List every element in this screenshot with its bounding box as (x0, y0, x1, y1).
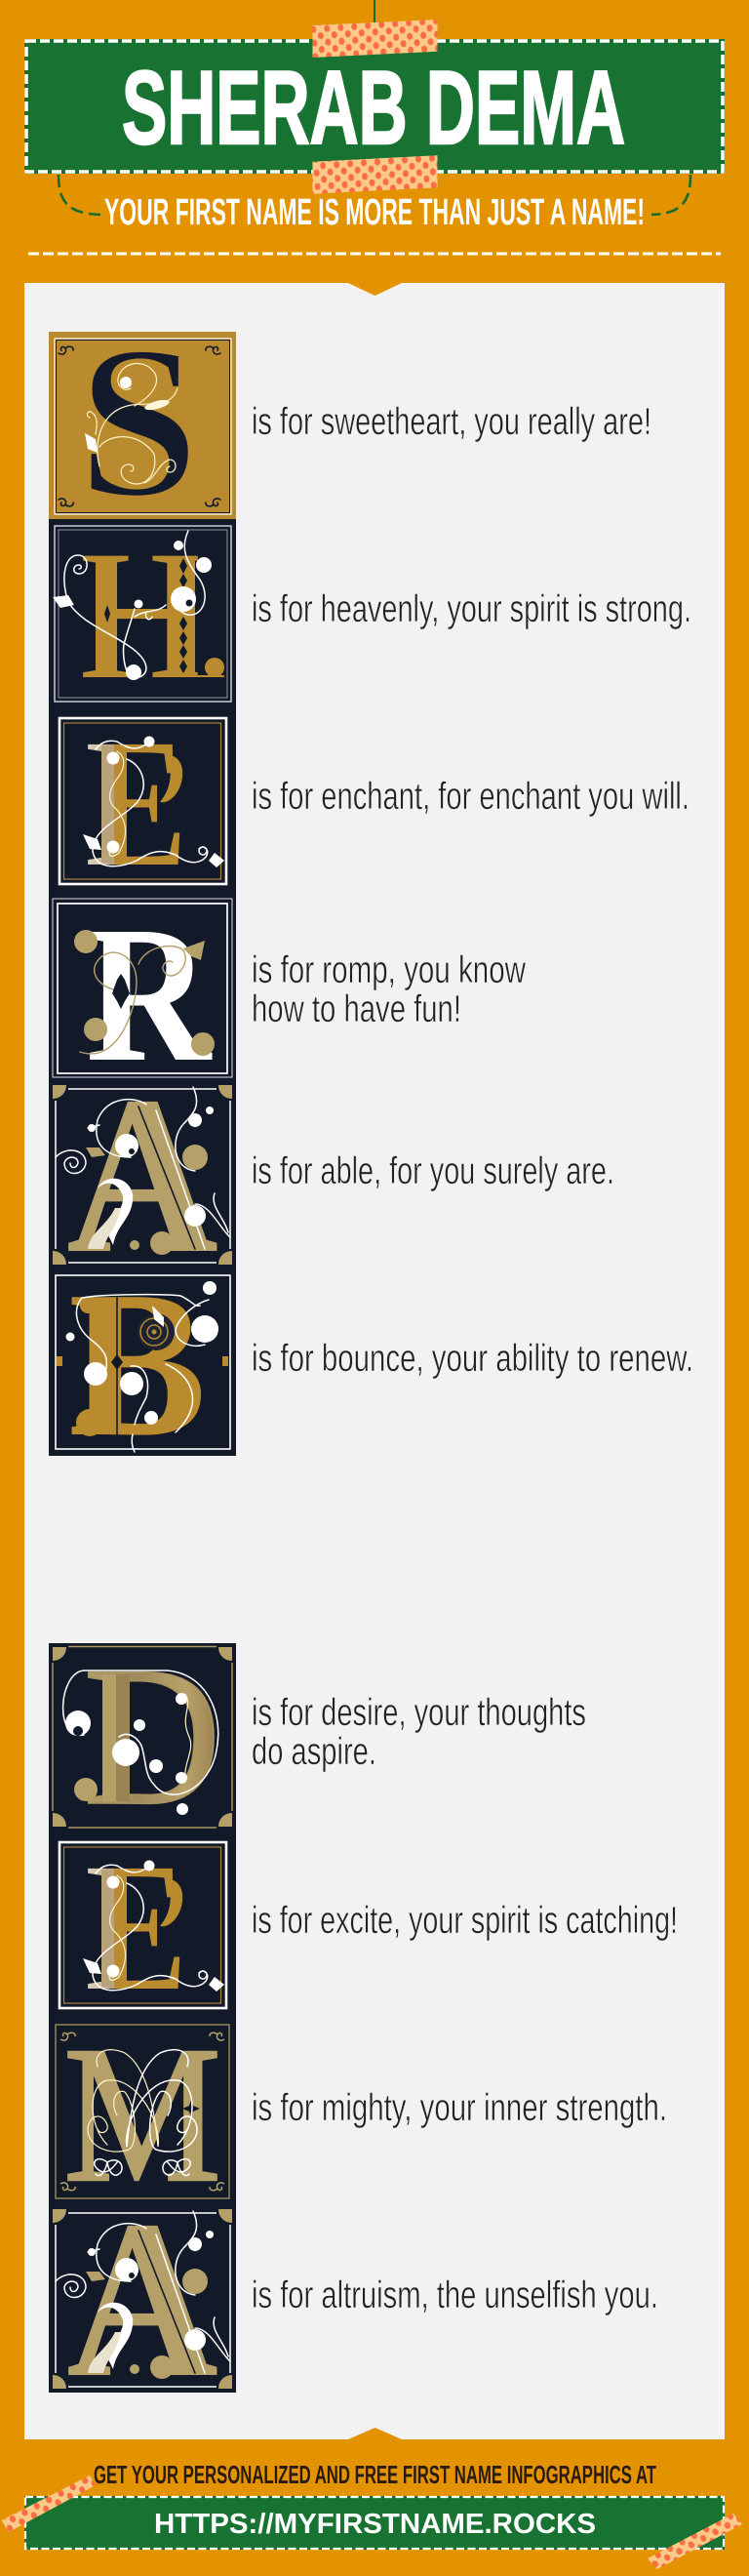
tile: E (49, 701, 236, 905)
panel: letters (24, 283, 725, 2439)
green dashed connector left (59, 175, 100, 215)
text: D lines: do aspire. (252, 1731, 376, 1773)
tape: footer left (2, 2475, 96, 2532)
tile: S (49, 300, 236, 543)
tile: E second (49, 1825, 236, 2029)
tile: E second: E (83, 1825, 188, 2029)
tile: A: A (66, 1050, 218, 1301)
tile: R: R (86, 887, 213, 1103)
dashed divider (28, 252, 721, 256)
footer url: HTTPS://MYFIRSTNAME.ROCKS (154, 2509, 596, 2540)
tile: S: S (77, 300, 200, 543)
tape: middle (312, 155, 437, 194)
tile: A second: A (66, 2174, 218, 2425)
text: D lines (252, 1692, 586, 1773)
green dashed connector right (651, 175, 690, 215)
tape: footer right (648, 2514, 742, 2569)
hanging string (374, 0, 375, 23)
tile: M: M (63, 2007, 221, 2223)
tile: B: B (68, 1247, 207, 1480)
panel top notch (348, 283, 402, 296)
text: R lines: how to have fun! (252, 988, 461, 1030)
tile: D: D (83, 1626, 221, 1847)
tile: H: H (78, 513, 203, 718)
text: R lines: is for romp, you know (252, 949, 527, 991)
panel bottom notch (348, 2428, 402, 2439)
tile: E: E (83, 701, 188, 905)
tape: top (312, 20, 437, 58)
text: R lines (252, 949, 527, 1030)
footer banner (24, 2496, 725, 2550)
text: D lines: is for desire, your thoughts (252, 1692, 586, 1734)
title banner (24, 39, 725, 174)
text: A line: is for able, for you surely are. (252, 1150, 614, 1192)
